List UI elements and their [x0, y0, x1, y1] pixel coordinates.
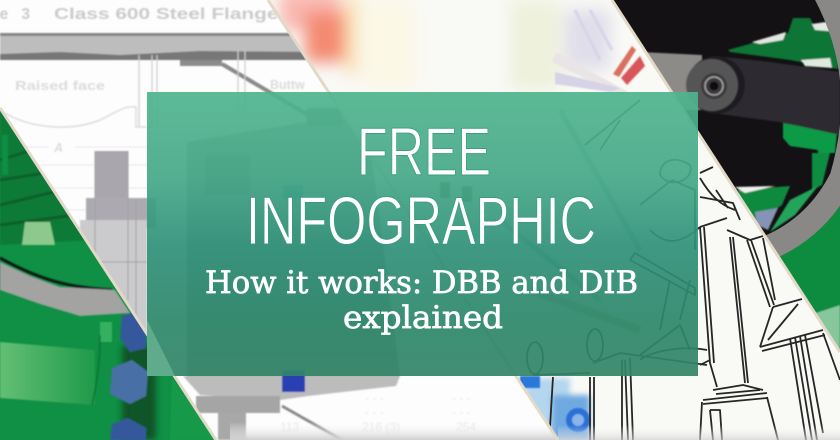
lighter panel corner: [147, 320, 175, 376]
drawing labels: Buttw: [270, 78, 305, 92]
light band: [0, 342, 95, 405]
faint table figures: - - -: [365, 391, 384, 405]
subtitle line 2: explained: [343, 300, 503, 336]
grey ring: [0, 262, 130, 316]
green title panel: [147, 92, 698, 376]
stripes: [520, 10, 645, 432]
faint table figures: - - -: [365, 405, 384, 419]
light green corner: [816, 304, 840, 350]
lower valve body: [183, 370, 400, 440]
subtitle line 1: How it works: DBB and DIB: [205, 265, 638, 301]
faint table figures: [282, 398, 474, 430]
faint table figures: - - -: [452, 405, 471, 419]
drawing labels: Raised face: [15, 79, 105, 93]
roller: [686, 56, 840, 135]
valve sketch: [527, 100, 840, 440]
dark interior: [614, 0, 840, 236]
table caption: [0, 6, 290, 23]
faint table figures: - - -: [452, 391, 471, 405]
faint table figures: 216 (3): [362, 420, 400, 434]
photo: green flange with bolts: [0, 111, 214, 440]
black gasket line: [0, 258, 112, 290]
bolts: [110, 312, 148, 440]
dark shadow: [122, 345, 156, 440]
support arm: [640, 52, 702, 110]
upper green valve: [728, 18, 840, 69]
raised face profile: [5, 107, 152, 127]
stacked green stripes: [0, 111, 84, 246]
pastel glow: [280, 0, 610, 90]
photo: flange drawing: [0, 6, 556, 440]
drawing labels: A: [53, 141, 63, 155]
photo: dark valve closeup: [600, 0, 840, 360]
grey section: [80, 108, 400, 378]
faint table figures: 113: [280, 420, 299, 434]
metal ring: [768, 0, 840, 248]
faint table figures: 254: [456, 420, 476, 434]
title: INFOGRAPHIC: INFOGRAPHIC: [246, 183, 596, 259]
flange bar: [0, 33, 320, 127]
title: FREE: FREE: [357, 114, 491, 190]
drawing labels: [15, 78, 305, 155]
photo: pastel render and sketch: [270, 0, 840, 440]
lower green valve: [735, 123, 837, 235]
under-panel tints: [440, 182, 472, 202]
table caption: Class 600 Steel Flanges: [54, 6, 290, 23]
